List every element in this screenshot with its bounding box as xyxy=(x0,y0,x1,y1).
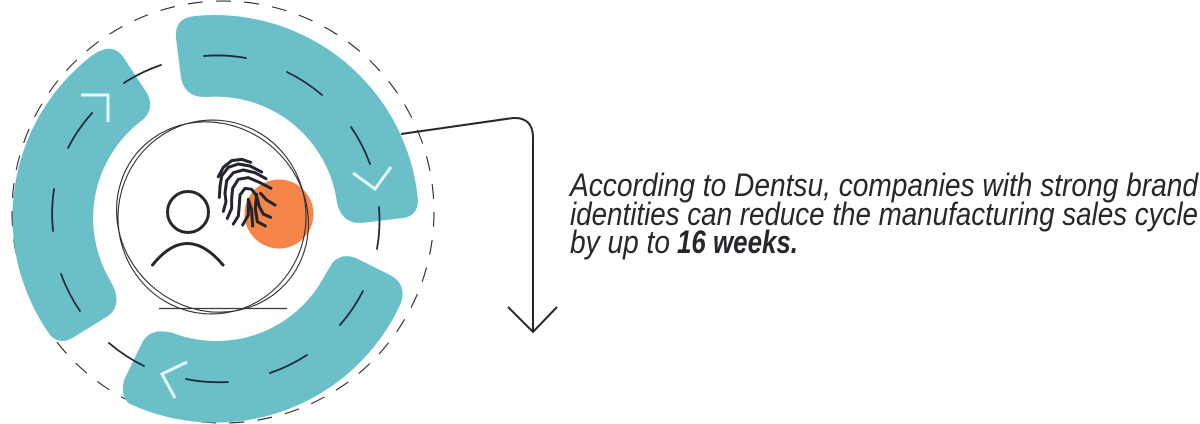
baseline xyxy=(159,308,287,310)
connector arrow xyxy=(401,118,557,332)
dashed outer ring xyxy=(12,1,434,423)
chevron: bottom xyxy=(162,362,187,398)
teal cycle ring xyxy=(12,15,418,423)
icon: person xyxy=(152,192,223,265)
chevron: right xyxy=(353,167,391,189)
segment: left xyxy=(12,49,150,341)
text line 3 emphasis: 16 weeks. xyxy=(677,224,798,260)
white direction chevrons xyxy=(81,95,391,398)
text line 3: by up to xyxy=(570,224,670,260)
segment: top right xyxy=(176,15,418,223)
segment: bottom xyxy=(123,256,403,423)
chevron: upper left xyxy=(81,95,108,122)
orange circle xyxy=(244,180,314,248)
icon: fingerprint xyxy=(218,159,275,226)
callout text xyxy=(568,167,1199,260)
sketched center circle xyxy=(77,82,348,352)
dark dashed mid-line arcs xyxy=(52,55,380,382)
